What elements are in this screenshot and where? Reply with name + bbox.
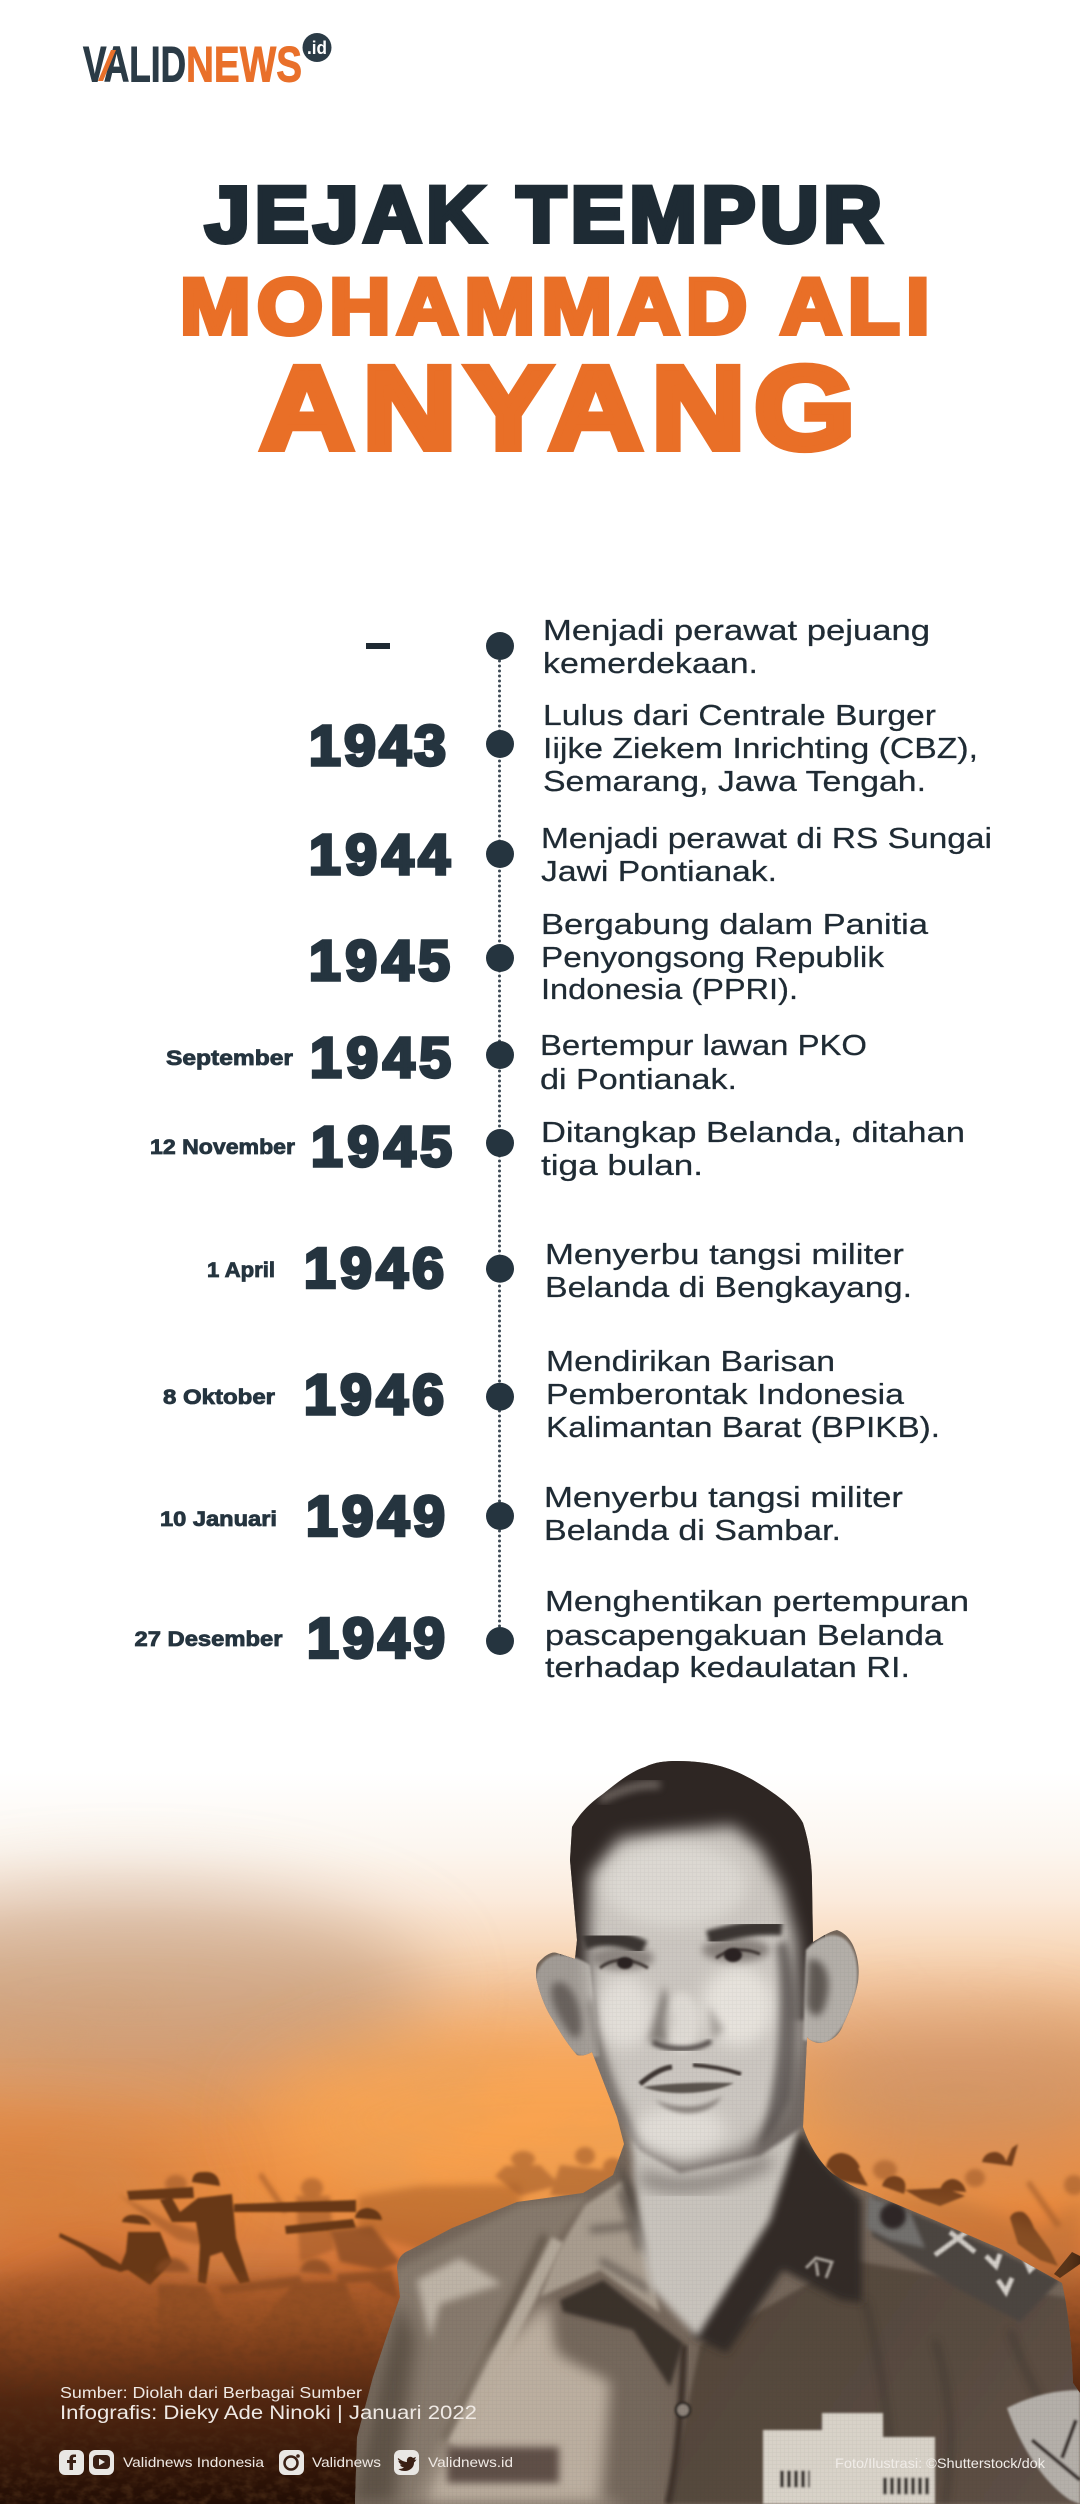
timeline entry: 27 Desember 1949: terhadap kedaulatan RI. — [545, 1652, 910, 1684]
source and credit text — [60, 2385, 477, 2424]
title line: Mohammad Ali: MOHAMMAD ALI — [180, 263, 930, 351]
timeline entry: 1943 — [309, 700, 978, 798]
uniform right side — [668, 2260, 1080, 2504]
head base and hair — [560, 1750, 825, 2173]
social media icons and handles: Validnews Indonesia — [123, 2454, 264, 2470]
timeline entry: 1943: Iijke Ziekem Inrichting (CBZ), — [543, 733, 978, 765]
timeline entry: 1 April 1946: Belanda di Bengkayang. — [545, 1272, 912, 1304]
timeline entry: 8 Oktober 1946: Kalimantan Barat (BPIKB). — [546, 1412, 940, 1444]
timeline entry: 1 April 1946: Menyerbu tangsi militer — [545, 1239, 904, 1271]
timeline entry: 12 November 1945 — [150, 1115, 965, 1182]
eyes and brows — [584, 1928, 782, 1970]
logo: Validnews.id: NEWS — [186, 36, 302, 92]
timeline entry: September 1945: di Pontianak. — [540, 1064, 737, 1096]
title line: Anyang: ANYANG — [260, 343, 855, 474]
timeline entry: 12 November 1945: tiga bulan. — [541, 1150, 703, 1182]
timeline entry: 10 Januari 1949: 10 Januari — [160, 1508, 277, 1531]
timeline entry: 1944: 1944 — [309, 823, 450, 887]
timeline entry: 10 Januari 1949: Menyerbu tangsi militer — [544, 1482, 903, 1514]
battlefield background scene — [0, 1807, 1080, 2504]
nose — [648, 1985, 724, 2052]
social media icons and handles — [59, 2450, 513, 2475]
shoulder strap with rank insignia — [866, 2196, 1060, 2322]
logo: Validnews.id: .id — [307, 38, 327, 58]
social media icons and handles: Validnews.id — [428, 2454, 513, 2470]
logo: Validnews.id: VALID — [83, 36, 186, 92]
photo credit: Foto/Ilustrasi: ©Shutterstock/dok — [835, 2455, 1046, 2471]
title — [180, 171, 930, 474]
timeline axis — [498, 646, 501, 1641]
medal ribbon patch — [763, 2413, 935, 2504]
timeline entry: no date: kemerdekaan. — [543, 648, 758, 680]
timeline entry: September 1945: 1945 — [310, 1026, 451, 1090]
social media icons and handles: Validnews — [312, 2454, 381, 2470]
timeline entry: 8 Oktober 1946: Mendirikan Barisan — [546, 1346, 835, 1378]
timeline entry: no date — [366, 615, 930, 680]
timeline entry: 1943: 1943 — [309, 714, 446, 778]
timeline entry: 10 Januari 1949: 1949 — [306, 1484, 445, 1548]
portrait of Mohammad Ali Anyang — [340, 1750, 1080, 2504]
ears — [535, 1935, 857, 2057]
timeline entry: 1 April 1946: 1946 — [304, 1236, 444, 1300]
timeline entry: September 1945: September — [166, 1047, 293, 1070]
timeline entry: 1944: Menjadi perawat di RS Sungai — [541, 823, 992, 855]
icon: youtube — [89, 2450, 114, 2475]
timeline entry: 27 Desember 1949: Menghentikan pertempuran — [545, 1586, 969, 1618]
timeline entry: 1945: 1945 — [309, 929, 450, 993]
halftone print texture — [422, 1835, 1078, 2504]
timeline entry: 12 November 1945: 12 November — [150, 1136, 295, 1159]
icon: twitter — [394, 2450, 419, 2475]
timeline entry: 8 Oktober 1946: Pemberontak Indonesia — [546, 1379, 905, 1411]
timeline entry: September 1945: Bertempur lawan PKO — [540, 1030, 867, 1062]
timeline entry: 27 Desember 1949 — [134, 1586, 969, 1684]
timeline entry: 10 Januari 1949 — [160, 1482, 903, 1548]
source and credit text: Infografis: Dieky Ade Ninoki | Januari 2022 — [60, 2403, 477, 2424]
shoulder patch — [1007, 2390, 1080, 2504]
timeline entry: 10 Januari 1949: Belanda di Sambar. — [544, 1515, 841, 1547]
timeline entry: 1 April 1946 — [207, 1236, 912, 1304]
timeline entry: 27 Desember 1949: 27 Desember — [134, 1628, 282, 1651]
soldiers silhouettes right and centre — [495, 2144, 1080, 2300]
timeline entry: 1943: Lulus dari Centrale Burger — [543, 700, 936, 732]
dark ground — [0, 2270, 1080, 2504]
timeline entry: 1945: Indonesia (PPRI). — [541, 974, 798, 1006]
timeline entry: 27 Desember 1949: pascapengakuan Belanda — [545, 1620, 944, 1652]
timeline entry: 12 November 1945: 1945 — [311, 1115, 452, 1179]
timeline entry: 1944: Jawi Pontianak. — [541, 856, 777, 888]
source and credit text: Sumber: Diolah dari Berbagai Sumber — [60, 2385, 362, 2402]
timeline entry: 8 Oktober 1946: 1946 — [304, 1363, 444, 1427]
title line: Jejak Tempur: JEJAK TEMPUR — [205, 171, 882, 258]
timeline entry: 1945: Penyongsong Republik — [541, 942, 885, 974]
icon: instagram — [279, 2450, 304, 2475]
mustache and mouth — [640, 2065, 741, 2113]
timeline entry: 1943: Semarang, Jawa Tengah. — [543, 766, 926, 798]
soldiers silhouettes left — [0, 2172, 520, 2504]
timeline entry: 8 Oktober 1946 — [163, 1346, 940, 1444]
face — [588, 1826, 798, 2166]
timeline entry: 12 November 1945: Ditangkap Belanda, ditahan — [541, 1117, 965, 1149]
timeline entry: 1944 — [309, 823, 992, 888]
timeline entry: 27 Desember 1949: 1949 — [307, 1606, 445, 1670]
uniform left side — [355, 2196, 620, 2504]
collars — [540, 2130, 862, 2387]
timeline entry: no date: Menjadi perawat pejuang — [543, 615, 930, 647]
timeline entry: 8 Oktober 1946: 8 Oktober — [163, 1386, 275, 1409]
timeline entry: 1945: Bergabung dalam Panitia — [541, 909, 929, 941]
logo: Validnews.id — [83, 33, 332, 92]
icon: facebook — [59, 2450, 84, 2475]
timeline entry: September 1945 — [166, 1026, 867, 1096]
timeline entry: 1945 — [309, 909, 929, 1006]
neck — [618, 2125, 800, 2337]
timeline entry: 1 April 1946: 1 April — [207, 1259, 275, 1282]
